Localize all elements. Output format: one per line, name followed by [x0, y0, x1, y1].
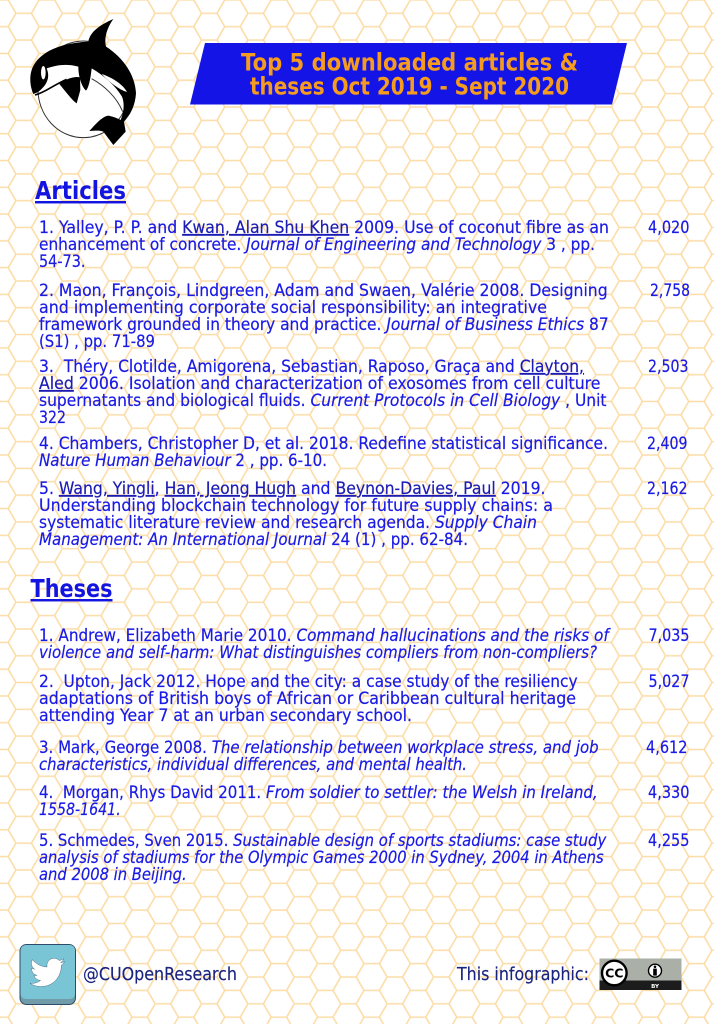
- title banner: theses Oct 2019 - Sept 2020: [250, 72, 569, 100]
- heading: Theses: Theses: [30, 574, 112, 603]
- article 1: [39, 218, 690, 271]
- article 5: 2,162: [647, 479, 688, 498]
- article 3: [39, 357, 688, 427]
- thesis 5: analysis of stadiums for the Olympic Games 2000 in Sydney, 2004 in Athens: [39, 848, 604, 867]
- thesis 5: 4,255: [648, 831, 690, 850]
- thesis 4: [39, 783, 690, 819]
- icon: CC BY licence badge: BY: [651, 984, 660, 990]
- thesis 4: 4. Morgan, Rhys David 2011. From soldier to settler: the Welsh in Ireland,: [39, 783, 598, 802]
- twitter handle: @CUOpenResearch: [83, 965, 237, 985]
- thesis 3: characteristics, individual differences, and mental health.: [39, 755, 467, 774]
- article 2: 2,758: [650, 281, 690, 300]
- icon: CC BY licence badge: CC: [605, 966, 623, 980]
- article 5: 5. Wang, Yingli, Han, Jeong Hugh and Beynon-Davies, Paul 2019.: [39, 479, 546, 498]
- article 1: 54-73.: [39, 252, 86, 271]
- article 4: Nature Human Behaviour 2 , pp. 6-10.: [39, 451, 327, 470]
- thesis 1: 1. Andrew, Elizabeth Marie 2010. Command hallucinations and the risks of: [39, 626, 611, 645]
- thesis 3: 3. Mark, George 2008. The relationship between workplace stress, and job: [39, 738, 599, 757]
- article 3: 3. Théry, Clotilde, Amigorena, Sebastian, Raposo, Graça and Clayton,: [39, 357, 584, 376]
- thesis 1: 7,035: [648, 626, 690, 645]
- article 4: [39, 434, 688, 470]
- heading: Articles: Articles: [35, 176, 126, 205]
- article 3: supernatants and biological fluids. Current Protocols in Cell Biology , Unit: [39, 391, 607, 410]
- article 2: framework grounded in theory and practice. Journal of Business Ethics 87: [39, 315, 609, 334]
- article 5: Understanding blockchain technology for future supply chains: a: [39, 496, 553, 515]
- article 2: and implementing corporate social responsibility: an integrative: [39, 298, 547, 317]
- article 4: 4. Chambers, Christopher D, et al. 2018. Redefine statistical significance.: [39, 434, 608, 453]
- thesis 2: 5,027: [648, 672, 690, 691]
- title banner: Top 5 downloaded articles &: [241, 48, 578, 76]
- thesis 5: [39, 831, 690, 884]
- article 5: Management: An International Journal 24 (1) , pp. 62-84.: [39, 530, 468, 549]
- article 4: 2,409: [647, 434, 688, 453]
- thesis 2: [39, 672, 690, 725]
- article 3: Aled 2006. Isolation and characterization of exosomes from cell culture: [39, 374, 600, 393]
- thesis 2: 2. Upton, Jack 2012. Hope and the city: a case study of the resiliency: [39, 672, 578, 691]
- article 1: 1. Yalley, P. P. and Kwan, Alan Shu Khen 2009. Use of coconut fibre as an: [39, 218, 609, 237]
- thesis 4: 4,330: [648, 783, 690, 802]
- title banner: [190, 43, 627, 104]
- thesis 3: 4,612: [646, 738, 688, 757]
- article 1: enhancement of concrete. Journal of Engineering and Technology 3 , pp.: [39, 235, 595, 254]
- thesis 2: attending Year 7 at an urban secondary school.: [39, 706, 412, 725]
- icon: CC BY licence badge: [600, 958, 682, 990]
- article 2: 2. Maon, François, Lindgreen, Adam and Swaen, Valérie 2008. Designing: [39, 281, 608, 300]
- thesis 5: 5. Schmedes, Sven 2015. Sustainable design of sports stadiums: case study: [39, 831, 607, 850]
- icon: orca logo: [30, 19, 136, 145]
- thesis 3: [39, 738, 688, 774]
- thesis 4: 1558-1641.: [39, 800, 121, 819]
- thesis 1: violence and self-harm: What distinguishes compliers from non-compliers?: [39, 643, 597, 662]
- article 5: [39, 479, 688, 549]
- thesis 5: and 2008 in Beijing.: [39, 865, 187, 884]
- article 3: 2,503: [648, 357, 688, 376]
- thesis 2: adaptations of British boys of African or Caribbean cultural heritage: [39, 689, 576, 708]
- infographic licence label: This infographic:: [456, 965, 589, 985]
- article 1: 4,020: [648, 218, 690, 237]
- article 2: [39, 281, 690, 351]
- article 2: (S1) , pp. 71-89: [39, 332, 155, 351]
- article 5: systematic literature review and research agenda. Supply Chain: [39, 513, 537, 532]
- thesis 1: [39, 626, 690, 662]
- article 3: 322: [39, 408, 66, 427]
- icon: twitter button: [20, 944, 76, 1004]
